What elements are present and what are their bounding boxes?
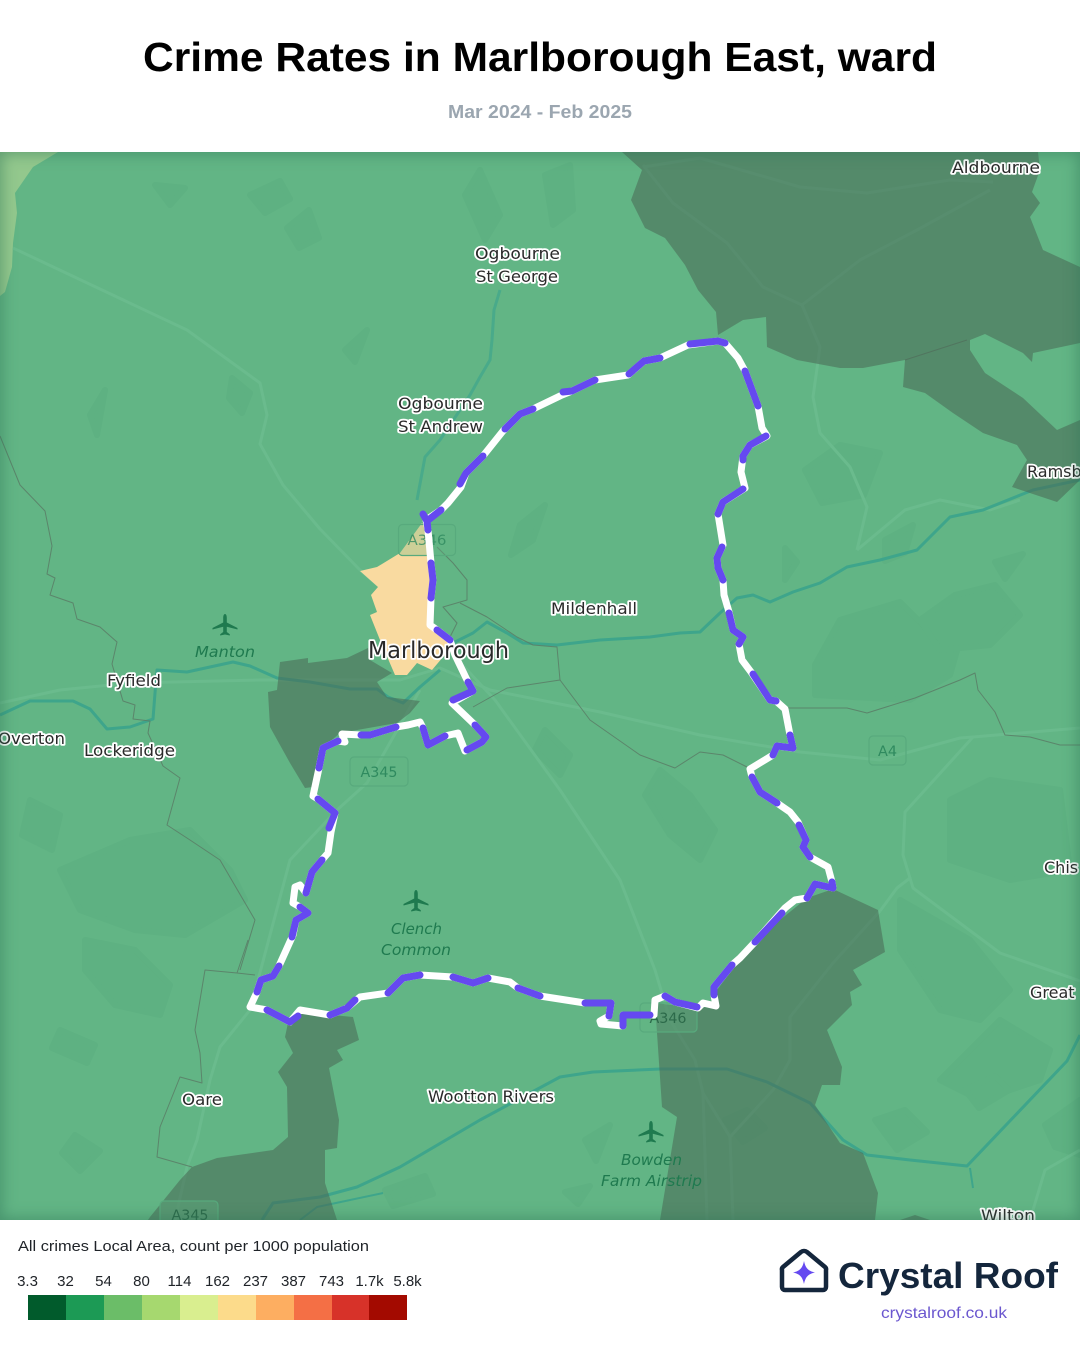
legend scale labels: 32	[57, 1273, 74, 1290]
road shield A346 north	[398, 524, 456, 556]
legend scale labels: 743	[319, 1273, 344, 1290]
legend scale labels: 3.3	[17, 1273, 38, 1290]
rivers and canal	[0, 290, 1080, 1220]
Marlborough higher crime area	[360, 523, 453, 675]
logo: Crystal Roof	[780, 1248, 1059, 1322]
place label: Fyfield: Fyfield	[107, 671, 161, 690]
legend scale labels: 54	[95, 1273, 112, 1290]
legend title: All crimes Local Area, count per 1000 population	[18, 1238, 369, 1255]
roads	[0, 158, 1080, 1220]
road shield A345 bottom	[160, 1201, 218, 1230]
dark area: bottom edge	[900, 1215, 930, 1220]
place label: Great (clipped): Great	[1030, 983, 1075, 1002]
place label: Marlborough: Marlborough	[368, 638, 509, 664]
legend scale labels: 1.7k	[355, 1273, 384, 1290]
high-density low-crime areas: north-east	[622, 152, 1080, 502]
page header: title and date range	[143, 34, 937, 122]
road shield A345	[350, 757, 408, 786]
website link text: crystalroof.co.uk	[881, 1305, 1008, 1322]
dark area: south-west	[148, 1012, 359, 1220]
airfield label: Bowden Farm Airstrip: Farm Airstrip	[601, 1172, 702, 1190]
road shield A4: A4	[878, 744, 897, 760]
place label: Ogbourne St George: St George	[476, 267, 558, 286]
terrain patches	[22, 165, 1080, 1206]
panel: choropleth map	[0, 152, 1080, 1220]
place label: Chisbury (clipped): Chis	[1044, 858, 1078, 877]
lighter neighbouring area top-left	[0, 152, 58, 296]
legend scale labels: 237	[243, 1273, 268, 1290]
dark area: south-east	[655, 889, 885, 1220]
road shield A346 north: A346	[408, 533, 446, 549]
place label: Ogbourne St Andrew: St Andrew	[398, 417, 483, 436]
place label: Wootton Rivers: Wootton Rivers	[428, 1087, 554, 1106]
place label: Lockeridge: Lockeridge	[84, 741, 175, 760]
legend scale labels: 80	[133, 1273, 150, 1290]
legend scale labels: 387	[281, 1273, 306, 1290]
panel: legend	[17, 1238, 422, 1320]
road shield A346 south: A346	[650, 1011, 686, 1027]
icon: house with star	[782, 1251, 826, 1290]
place label: Oare: Oare	[182, 1090, 222, 1109]
icon: airfield Clench Common	[404, 890, 428, 912]
ward boundary: Marlborough East	[250, 341, 833, 1026]
road shield A4	[869, 736, 906, 765]
wordmark: Crystal Roof	[838, 1255, 1059, 1296]
place label: Aldbourne: Aldbourne	[952, 158, 1040, 177]
airfield label: Manton: Manton	[195, 643, 255, 661]
dark area: west of Marlborough	[268, 648, 420, 788]
place label: Ogbourne St Andrew: Ogbourne	[398, 394, 483, 413]
title: Crime Rates in Marlborough East, ward	[143, 34, 937, 80]
road shield A345: A345	[360, 765, 398, 781]
legend scale labels: 162	[205, 1273, 230, 1290]
administrative boundaries	[0, 340, 1080, 1167]
legend scale labels: 114	[168, 1273, 191, 1290]
legend colour bar	[28, 1295, 407, 1320]
icon: airfield Manton	[212, 614, 238, 636]
place label: Mildenhall: Mildenhall	[551, 599, 637, 618]
airfield label: Clench Common: Common	[381, 941, 451, 959]
place label: Ogbourne St George: Ogbourne	[475, 244, 560, 263]
road shield A346 south	[640, 1003, 697, 1032]
date range subtitle: Mar 2024 - Feb 2025	[448, 101, 632, 122]
legend scale labels	[17, 1273, 422, 1290]
airfield label: Bowden Farm Airstrip: Bowden	[621, 1151, 682, 1169]
map base	[0, 152, 1080, 1220]
legend scale labels: 5.8k	[393, 1273, 422, 1290]
icon: airfield Bowden Farm	[638, 1121, 664, 1142]
airfield label: Clench Common: Clench	[391, 920, 442, 938]
